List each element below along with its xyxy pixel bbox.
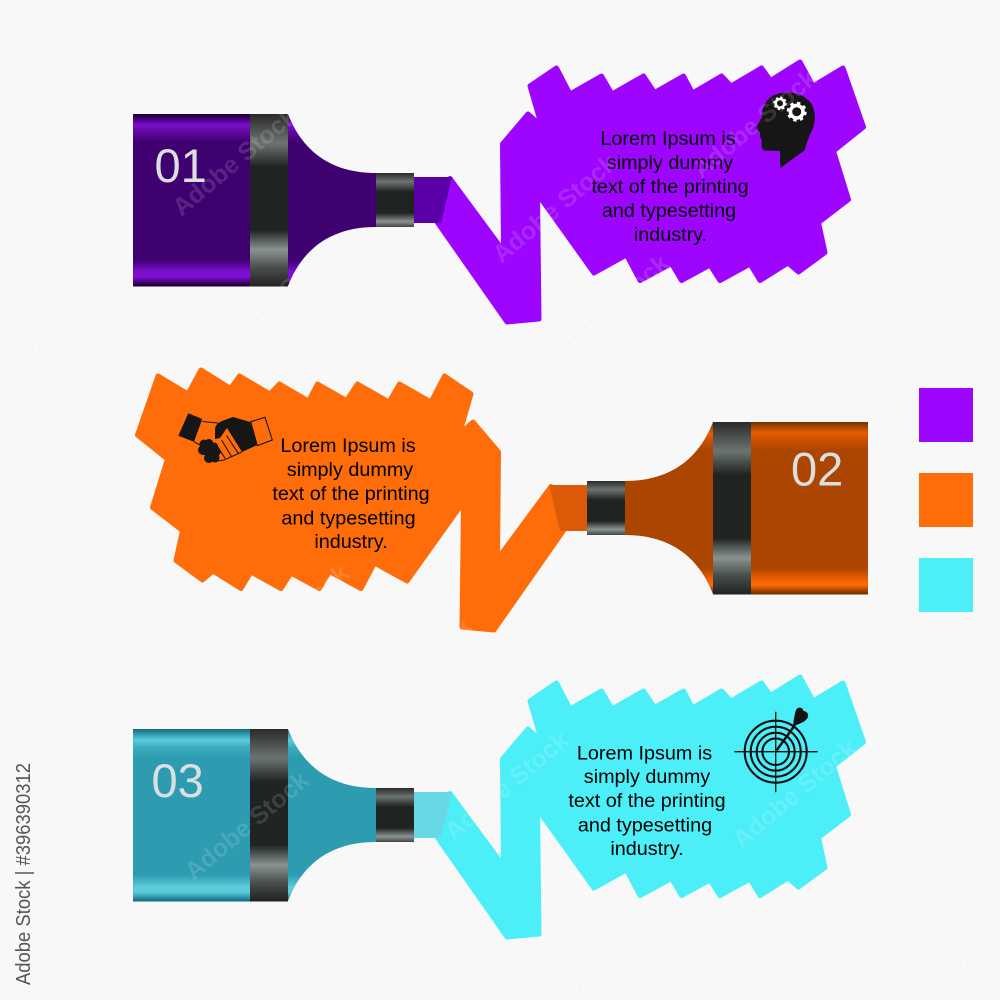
watermark layer: Adobe Stock bbox=[0, 264, 134, 384]
watermark layer: Adobe Stock bbox=[12, 606, 147, 726]
watermark layer: Adobe Stock bbox=[687, 64, 822, 184]
translated marker and splash 03 bbox=[133, 677, 864, 937]
marker body 03 bbox=[133, 729, 250, 902]
text block 03: Lorem Ipsum is bbox=[577, 742, 712, 764]
marker band 02 bbox=[713, 422, 751, 594]
text block 03 bbox=[568, 742, 726, 860]
marker body 01 bbox=[133, 114, 250, 286]
text block 03: simply dummy bbox=[584, 766, 710, 788]
text block 01: text of the printing bbox=[591, 176, 749, 198]
panel: marker 01 bbox=[133, 62, 864, 322]
marker neck 01 bbox=[288, 114, 376, 286]
marker collar 02 bbox=[587, 481, 625, 535]
text block 02: simply dummy bbox=[287, 459, 413, 481]
ink splash 01 bbox=[437, 62, 864, 322]
watermark layer: Adobe Stock bbox=[847, 782, 982, 902]
text block 02 bbox=[272, 435, 430, 553]
watermark layer: Adobe Stock bbox=[727, 734, 862, 854]
ink splash 03 bbox=[437, 677, 864, 937]
watermark layer: Adobe Stock bbox=[179, 766, 314, 886]
watermark layer: Adobe Stock bbox=[167, 102, 302, 222]
icon: head with gears bbox=[756, 92, 815, 168]
marker tip 02 bbox=[549, 485, 587, 531]
text block 02: industry. bbox=[314, 531, 388, 553]
panel: marker 02 bbox=[138, 370, 868, 630]
text block 02: text of the printing bbox=[272, 483, 430, 505]
watermark layer: Stock bbox=[85, 926, 155, 991]
watermark layer: Adobe Stock bbox=[669, 282, 804, 402]
text block 02: and typesetting bbox=[281, 508, 416, 530]
marker tip 03 bbox=[414, 792, 452, 838]
text block 03: industry. bbox=[610, 838, 684, 860]
watermark layer: Adobe Stock bbox=[345, 269, 480, 389]
icon: target with dart bbox=[734, 708, 818, 792]
marker tip 01 bbox=[414, 177, 452, 223]
watermark layer: Adobe Stock bbox=[439, 726, 574, 846]
watermark layer: Adobe bbox=[918, 928, 996, 1000]
watermark layer: Adobe Stock bbox=[549, 564, 684, 684]
text block 03: text of the printing bbox=[568, 790, 726, 812]
watermark layer: Adobe Stock bbox=[219, 559, 354, 679]
marker band 03 bbox=[250, 729, 288, 902]
mirrored marker and splash 02 bbox=[138, 370, 868, 630]
text block 03: and typesetting bbox=[578, 814, 712, 836]
marker band 01 bbox=[250, 114, 288, 286]
legend swatch: purple bbox=[919, 388, 973, 442]
number 03: 03 bbox=[152, 754, 204, 807]
icon: handshake bbox=[178, 413, 272, 463]
marker neck 02 bbox=[625, 422, 713, 594]
text block 01 bbox=[591, 128, 749, 246]
text block 01: simply dummy bbox=[607, 152, 733, 174]
marker collar 03 bbox=[376, 788, 414, 842]
marker collar 01 bbox=[376, 173, 414, 227]
ink splash 02 bbox=[138, 370, 564, 630]
watermark layer: Adobe Stock bbox=[209, 239, 344, 359]
text block 02: Lorem Ipsum is bbox=[280, 435, 416, 457]
watermark layer: Adobe Stock bbox=[37, 56, 172, 176]
stock id text: Adobe Stock | #396390312 bbox=[13, 763, 35, 985]
number 01: 01 bbox=[154, 139, 207, 192]
text block 01: and typesetting bbox=[602, 200, 736, 222]
panel: marker 03 bbox=[133, 677, 864, 937]
watermark layer: Adobe Stock bbox=[342, 612, 477, 732]
watermark layer: Adobe bbox=[406, 923, 484, 995]
legend swatch: cyan bbox=[919, 558, 973, 612]
watermark layer: Adobe Stock bbox=[827, 119, 962, 239]
watermark layer: Adobe Stock bbox=[367, 54, 502, 174]
number 02: 02 bbox=[791, 443, 843, 496]
text block 01: Lorem Ipsum is bbox=[600, 128, 736, 150]
legend swatch: orange bbox=[919, 473, 973, 527]
marker neck 03 bbox=[288, 729, 376, 901]
text block 01: industry. bbox=[634, 224, 707, 246]
marker body 02 bbox=[751, 422, 868, 594]
watermark layer: Adobe Stock bbox=[539, 249, 674, 369]
watermark layer: Adobe Stock bbox=[487, 149, 622, 269]
